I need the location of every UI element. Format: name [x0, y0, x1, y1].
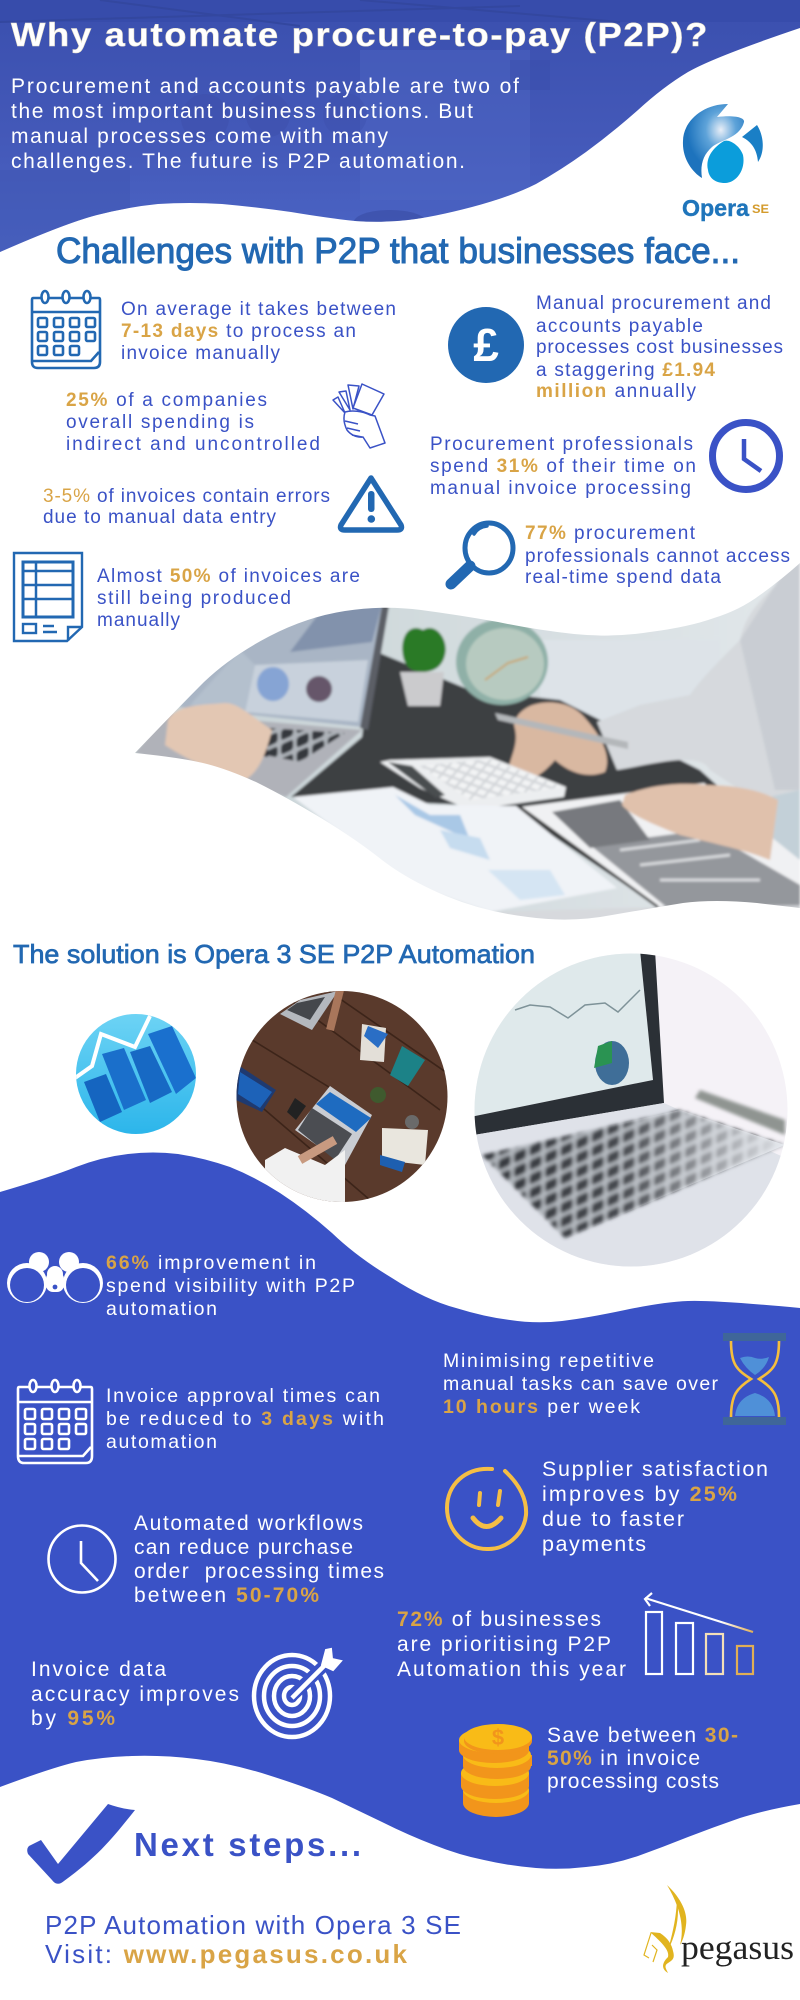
photo circle: team at a table	[236, 991, 448, 1202]
hand on laptop	[165, 703, 272, 780]
benefit: prioritising automation: Automation this year	[397, 1658, 626, 1681]
panel: blue solution benefits	[0, 1152, 800, 1869]
intro paragraph: Procurement and accounts payable are two of	[11, 75, 519, 98]
benefit: prioritising automation: 72% of businesses	[397, 1608, 601, 1631]
challenge: invoice processing days: On average it takes between	[121, 299, 396, 320]
icon: calendar	[18, 1380, 92, 1463]
benefit: automated workflows: Automated workflows	[134, 1512, 363, 1535]
call to action: P2P Automation with Opera 3 SE	[45, 1910, 461, 1940]
benefit: spend visibility: spend visibility with P2P	[106, 1275, 355, 1297]
intro paragraph: challenges. The future is P2P automation.	[11, 150, 465, 173]
benefit: processing costs	[459, 1724, 738, 1817]
benefit: supplier satisfaction: due to faster	[542, 1507, 684, 1531]
hand on calculator	[507, 702, 607, 781]
challenge: time on manual processing: Procurement professionals	[430, 434, 693, 455]
title: Why automate procure-to-pay (P2P)?	[11, 16, 709, 53]
icon: magnifying glass	[451, 523, 513, 584]
heading: challenges: Challenges with P2P that businesses face...	[56, 230, 740, 271]
benefit: data accuracy: accuracy improves	[31, 1683, 239, 1706]
benefit: processing costs: processing costs	[547, 1770, 719, 1793]
clock	[456, 619, 548, 705]
challenge: invoice processing days: invoice manually	[121, 343, 280, 364]
benefit: approval times: Invoice approval times can	[106, 1385, 380, 1407]
challenge: indirect spend: 25% of a companies	[66, 390, 267, 411]
Opera wordmark: Opera	[682, 195, 749, 221]
challenge: indirect spend	[66, 384, 385, 455]
challenge: time on manual processing	[430, 422, 780, 499]
benefit: spend visibility: automation	[106, 1298, 217, 1320]
benefit: supplier satisfaction: Supplier satisfaction	[542, 1457, 768, 1481]
challenge: indirect spend: indirect and uncontrolled	[66, 434, 320, 455]
benefit: approval times: automation	[106, 1431, 217, 1453]
challenge: annual cost	[448, 293, 783, 402]
challenge: indirect spend: overall spending is	[66, 412, 254, 433]
benefit: repetitive tasks: Minimising repetitive	[443, 1350, 654, 1372]
challenge: invoice errors: due to manual data entry	[43, 507, 276, 528]
icon: warning triangle	[340, 478, 402, 530]
icon: clock	[48, 1526, 116, 1592]
challenge: real-time spend data: 77% procurement	[525, 523, 696, 544]
calculator	[380, 757, 566, 810]
benefit: repetitive tasks: manual tasks can save over	[443, 1373, 718, 1395]
icon: pound coin: £	[473, 319, 499, 371]
challenge: invoice processing days	[32, 291, 396, 368]
challenge: invoice errors	[43, 478, 402, 530]
photo circle: bar chart	[76, 1014, 196, 1134]
Pegasus logo	[644, 1885, 794, 1973]
benefit: approval times: be reduced to 3 days with	[106, 1408, 384, 1430]
icon: check mark	[27, 1804, 135, 1884]
challenge: time on manual processing: spend 31% of their time on	[430, 456, 696, 477]
call to action: Visit: www.pegasus.co.uk	[45, 1939, 408, 1969]
benefit: repetitive tasks	[443, 1333, 786, 1425]
benefit: spend visibility	[7, 1252, 355, 1320]
benefit: supplier satisfaction	[447, 1457, 768, 1556]
benefit: supplier satisfaction: payments	[542, 1532, 646, 1556]
Opera SE logo: SE	[752, 202, 769, 216]
icon: document	[14, 553, 82, 641]
icon: falling bar chart	[645, 1593, 753, 1674]
benefit: automated workflows: between 50-70%	[134, 1584, 319, 1607]
icon: smiley	[447, 1469, 526, 1549]
pen	[495, 713, 628, 749]
benefit: automated workflows	[48, 1512, 384, 1607]
dark report	[520, 783, 800, 907]
shirt	[595, 594, 790, 796]
challenge: annual cost: Manual procurement and	[536, 293, 771, 314]
icon: target with arrow	[254, 1649, 341, 1737]
photo circle: laptop	[470, 950, 790, 1270]
challenge: real-time spend data	[451, 523, 790, 588]
intro paragraph: manual processes come with many	[11, 125, 388, 148]
icon: winged horse	[644, 1885, 686, 1973]
benefit: processing costs: Save between 30-	[547, 1724, 738, 1747]
benefit: spend visibility: 66% improvement in	[106, 1252, 316, 1274]
laptop base	[135, 713, 362, 797]
challenge: real-time spend data: real-time spend data	[525, 567, 721, 588]
icon: coin stack	[459, 1724, 532, 1817]
icon: binoculars	[7, 1252, 103, 1303]
challenge: annual cost: million annually	[536, 381, 696, 402]
plant	[402, 628, 446, 672]
benefit: processing costs: 50% in invoice	[547, 1747, 700, 1770]
icon: hourglass	[723, 1333, 786, 1425]
call to action	[45, 1910, 461, 1969]
benefit: data accuracy: by 95%	[31, 1707, 115, 1730]
challenge: time on manual processing: manual invoice processing	[430, 478, 691, 499]
Opera SE logo	[682, 104, 769, 221]
benefit: approval times	[18, 1380, 384, 1463]
challenge: invoice processing days: 7-13 days to process an	[121, 321, 356, 342]
desk	[290, 652, 718, 883]
icon: hand holding cash	[333, 384, 385, 448]
challenge: manual invoices: Almost 50% of invoices are	[97, 566, 360, 587]
challenge: invoice errors: 3-5% of invoices contain errors	[43, 486, 330, 507]
challenge: annual cost: processes cost businesses	[536, 337, 783, 358]
benefit: supplier satisfaction: improves by 25%	[542, 1482, 737, 1506]
benefit: automated workflows: can reduce purchase	[134, 1536, 353, 1559]
laptop screen	[179, 600, 383, 727]
header banner	[0, 0, 800, 260]
challenge: manual invoices	[14, 553, 360, 641]
icon: clock	[712, 422, 780, 490]
icon: pound coin	[448, 307, 524, 383]
hand on papers	[622, 784, 778, 860]
challenge: annual cost: a staggering £1.94	[536, 360, 715, 381]
papers	[293, 787, 617, 912]
Pegasus logo: pegasus	[681, 1928, 794, 1967]
benefit: data accuracy	[31, 1649, 341, 1737]
icon: coin stack: $	[492, 1725, 504, 1750]
challenge: manual invoices: manually	[97, 610, 180, 631]
challenge: real-time spend data: professionals cannot access	[525, 546, 790, 567]
icon: calendar	[32, 291, 100, 368]
benefit: data accuracy: Invoice data	[31, 1658, 166, 1681]
benefit: automated workflows: order processing times	[134, 1560, 384, 1583]
benefit: repetitive tasks: 10 hours per week	[443, 1396, 640, 1418]
intro paragraph: the most important business functions. But	[11, 100, 473, 123]
intro paragraph	[11, 75, 519, 173]
heading: next steps: Next steps...	[134, 1826, 361, 1863]
challenge: annual cost: accounts payable	[536, 316, 703, 337]
benefit: prioritising automation: are prioritising P2P	[397, 1633, 611, 1656]
benefit: prioritising automation	[397, 1593, 753, 1681]
photo: hands with calculator and laptop	[130, 555, 800, 930]
challenge: manual invoices: still being produced	[97, 588, 291, 609]
heading: solution: The solution is Opera 3 SE P2P Automation	[13, 939, 535, 969]
